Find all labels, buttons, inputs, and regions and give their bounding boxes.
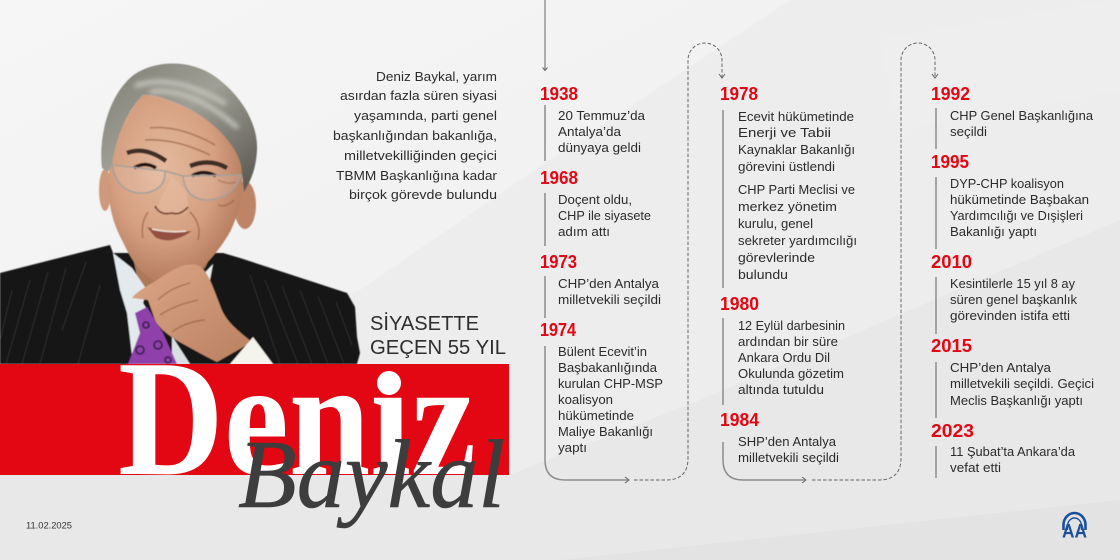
years: 1992 bbox=[931, 83, 970, 104]
portrait photo bbox=[0, 64, 360, 364]
entries: Bülent Ecevit’in bbox=[558, 345, 647, 359]
entries: Enerji ve Tabii bbox=[738, 126, 831, 140]
entries: görevinden istifa etti bbox=[950, 309, 1070, 323]
entries: altında tutuldu bbox=[738, 383, 824, 397]
intro text: milletvekilliğinden geçici bbox=[344, 149, 497, 163]
shirt collar bbox=[113, 253, 175, 364]
entries: koalisyon bbox=[558, 393, 613, 407]
years bbox=[931, 83, 974, 441]
entries: CHP’den Antalya bbox=[558, 277, 659, 291]
nose bbox=[157, 176, 188, 214]
intro text: birçok görevde bulundu bbox=[349, 188, 497, 202]
entries: 11 Şubat’ta Ankara’da bbox=[950, 445, 1075, 459]
subtitle: SİYASETTE bbox=[370, 312, 479, 335]
entries: Antalya’da bbox=[558, 125, 621, 139]
title: Baykal: Baykal bbox=[238, 421, 505, 529]
arrow head: column 2 bbox=[719, 74, 725, 78]
entries: Kaynaklar Bakanlığı bbox=[738, 143, 855, 157]
column 1 timeline bbox=[540, 83, 663, 483]
column 2 timeline bbox=[720, 83, 857, 483]
title: Deniz bbox=[120, 365, 473, 474]
intro text bbox=[333, 70, 497, 202]
entries: vefat etti bbox=[950, 461, 1001, 475]
entries: bulundu bbox=[738, 268, 788, 282]
entries bbox=[950, 109, 1094, 475]
intro text: asırdan fazla süren siyasi bbox=[340, 89, 497, 103]
years: 1995 bbox=[931, 151, 969, 172]
entries: Doçent oldu, bbox=[558, 193, 632, 207]
title: Deniz: Deniz bbox=[118, 326, 476, 510]
entries: milletvekili seçildi. Geçici bbox=[950, 377, 1094, 391]
years: 2015 bbox=[931, 335, 972, 356]
entries: hükümetinde Başbakan bbox=[950, 193, 1089, 207]
entries: dünyaya geldi bbox=[558, 141, 641, 155]
years: 2010 bbox=[931, 251, 972, 272]
years: 1938 bbox=[540, 83, 578, 104]
intro text: başkanlığından bakanlığa, bbox=[333, 129, 497, 143]
red title band bbox=[0, 364, 509, 475]
finger creases bbox=[158, 283, 205, 332]
entries: Maliye Bakanlığı bbox=[558, 425, 653, 439]
entries: sekreter yardımcılığı bbox=[738, 234, 857, 248]
years: 1974 bbox=[540, 319, 577, 340]
connector bars bbox=[545, 105, 628, 480]
years bbox=[540, 83, 578, 340]
brows bbox=[127, 151, 227, 168]
icon: AA logo bbox=[1062, 513, 1087, 542]
entries: süren genel başkanlık bbox=[950, 293, 1078, 307]
entries: Meclis Başkanlığı yaptı bbox=[950, 394, 1083, 408]
entries: 12 Eylül darbesinin bbox=[738, 319, 845, 333]
entries: hükümetinde bbox=[558, 409, 634, 423]
entries: görevlerinde bbox=[738, 251, 815, 265]
intro text: TBMM Başkanlığına kadar bbox=[336, 169, 497, 183]
cuff bbox=[230, 337, 273, 364]
intro text: yaşamında, parti genel bbox=[354, 109, 497, 123]
entries: görevini üstlendi bbox=[738, 160, 835, 174]
neck bbox=[128, 228, 224, 298]
date: 11.02.2025 bbox=[26, 520, 72, 530]
years: 2023 bbox=[931, 420, 974, 441]
entries: Bakanlığı yaptı bbox=[950, 225, 1037, 239]
years: 1984 bbox=[720, 409, 760, 430]
arrow head: column 3 bbox=[932, 74, 938, 78]
entries: kurulan CHP-MSP bbox=[558, 377, 663, 391]
entries: milletvekili seçildi bbox=[738, 451, 839, 465]
years: 1973 bbox=[540, 251, 577, 272]
arrow: to column 2 bbox=[625, 477, 629, 483]
entries bbox=[738, 110, 857, 465]
entries: seçildi bbox=[950, 125, 987, 139]
ears bbox=[99, 169, 111, 211]
entries: Başbakanlığında bbox=[558, 361, 657, 375]
pinstripes bbox=[0, 262, 352, 364]
connector bars bbox=[723, 110, 805, 480]
entries: Kesintilerle 15 yıl 8 ay bbox=[950, 277, 1076, 291]
entries: CHP’den Antalya bbox=[950, 361, 1051, 375]
column 3 timeline bbox=[931, 83, 1094, 478]
entries: CHP Genel Başkanlığına bbox=[950, 109, 1093, 123]
entries: Ankara Ordu Dil bbox=[738, 351, 830, 365]
entries: Yardımcılığı ve Dışişleri bbox=[950, 209, 1083, 223]
arrow: timeline start bbox=[542, 0, 548, 70]
jacket bbox=[0, 245, 360, 364]
hair bbox=[101, 64, 257, 192]
entries: yaptı bbox=[558, 441, 587, 455]
years: 1980 bbox=[720, 293, 759, 314]
entries: Ecevit hükümetinde bbox=[738, 110, 854, 124]
connector bars bbox=[935, 108, 937, 478]
entries: CHP Parti Meclisi ve bbox=[738, 183, 855, 197]
entries: merkez yönetim bbox=[738, 200, 837, 214]
entries: 20 Temmuz’da bbox=[558, 109, 645, 123]
hand bbox=[132, 264, 252, 362]
glasses bbox=[112, 165, 241, 200]
entries bbox=[558, 109, 663, 455]
dashed connector: column 2 to 3 bbox=[812, 43, 935, 480]
icon: AA logo: AA bbox=[1062, 522, 1087, 542]
eyes bbox=[134, 164, 216, 176]
mouth bbox=[147, 227, 192, 240]
subtitle bbox=[370, 312, 506, 359]
entries: Okulunda gözetim bbox=[738, 367, 844, 381]
intro text: Deniz Baykal, yarım bbox=[376, 70, 497, 84]
arrow: to column 3 bbox=[802, 477, 806, 483]
subtitle: GEÇEN 55 YIL bbox=[370, 337, 506, 359]
face creases bbox=[142, 128, 236, 240]
dashed connector: column 1 to 2 bbox=[634, 43, 722, 480]
entries: SHP’den Antalya bbox=[738, 435, 836, 449]
years bbox=[720, 83, 760, 430]
years: 1968 bbox=[540, 167, 578, 188]
face bbox=[108, 95, 242, 283]
years: 1978 bbox=[720, 83, 758, 104]
entries: kurulu, genel bbox=[738, 217, 813, 231]
entries: adım attı bbox=[558, 225, 610, 239]
entries: DYP-CHP koalisyon bbox=[950, 177, 1064, 191]
entries: milletvekili seçildi bbox=[558, 293, 661, 307]
entries: CHP ile siyasete bbox=[558, 209, 651, 223]
entries: ardından bir süre bbox=[738, 335, 838, 349]
tie bbox=[128, 307, 177, 364]
